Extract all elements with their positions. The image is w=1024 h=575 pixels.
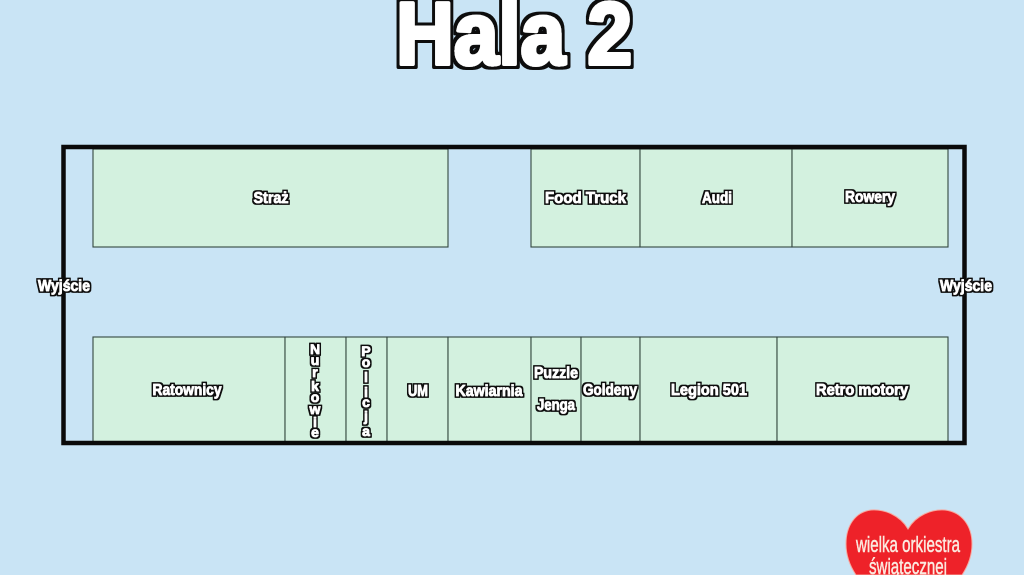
stand: Policja (vertical): a [362, 423, 370, 439]
stand: Nurkowie (vertical): o [311, 389, 319, 405]
stand: Food Truck: Food Truck [545, 190, 626, 207]
stand: Policja (vertical): i [364, 384, 368, 400]
stand: Kawiarnia: Kawiarnia [456, 383, 523, 400]
stand: Puzzle / Jenga: Puzzle [534, 365, 578, 382]
stand: Ratownicy [93, 337, 285, 442]
stand: Audi [640, 149, 792, 247]
stand: Policja (vertical): l [364, 369, 368, 385]
stand: Rowery [792, 149, 948, 247]
stand: Goldeny [581, 337, 640, 442]
stand: Retro motory [777, 337, 948, 442]
logo: WOŚP heart: wielka orkiestra [855, 532, 961, 557]
stand: Ratownicy: Ratownicy [152, 382, 222, 399]
stand: Rowery: Rowery [845, 189, 895, 206]
stand: Nurkowie (vertical): u [311, 352, 319, 368]
stand: Food Truck [531, 149, 640, 247]
stand: Goldeny: Goldeny [583, 382, 637, 399]
stand: Puzzle / Jenga [531, 337, 581, 442]
stand: Policja (vertical): c [362, 394, 370, 410]
logo: WOŚP heart [846, 510, 972, 575]
stand: Straż: Straż [254, 190, 288, 207]
stand: Audi: Audi [702, 190, 732, 207]
bottom row of stands [93, 337, 948, 442]
stand: Nurkowie (vertical): N [310, 341, 320, 357]
stand: Nurkowie (vertical): k [311, 378, 319, 394]
stand: Policja (vertical): o [362, 354, 370, 370]
stand: Policja (vertical): P [361, 343, 371, 359]
exit label left: Wyjście [38, 278, 90, 295]
stand: Nurkowie (vertical): w [309, 401, 321, 417]
stand: Nurkowie (vertical): e [311, 424, 319, 440]
stand: UM: UM [408, 383, 428, 400]
stand: Legion 501 [640, 337, 777, 442]
stand: Nurkowie (vertical) [285, 337, 346, 442]
exit label right: Wyjście [940, 278, 992, 295]
stand: Kawiarnia [448, 337, 531, 442]
stand: Nurkowie (vertical): r [312, 364, 318, 380]
stand: Puzzle / Jenga: Jenga [537, 397, 575, 414]
stand: Legion 501: Legion 501 [671, 382, 747, 399]
stand: Retro motory: Retro motory [816, 382, 908, 399]
stand: UM [387, 337, 448, 442]
top row of stands [93, 149, 948, 247]
stand: Nurkowie (vertical): i [313, 414, 317, 430]
hall outline [64, 147, 964, 443]
stand: Policja (vertical): j [363, 408, 368, 424]
stand: Policja (vertical) [346, 337, 387, 442]
stand: Straż [93, 149, 448, 247]
